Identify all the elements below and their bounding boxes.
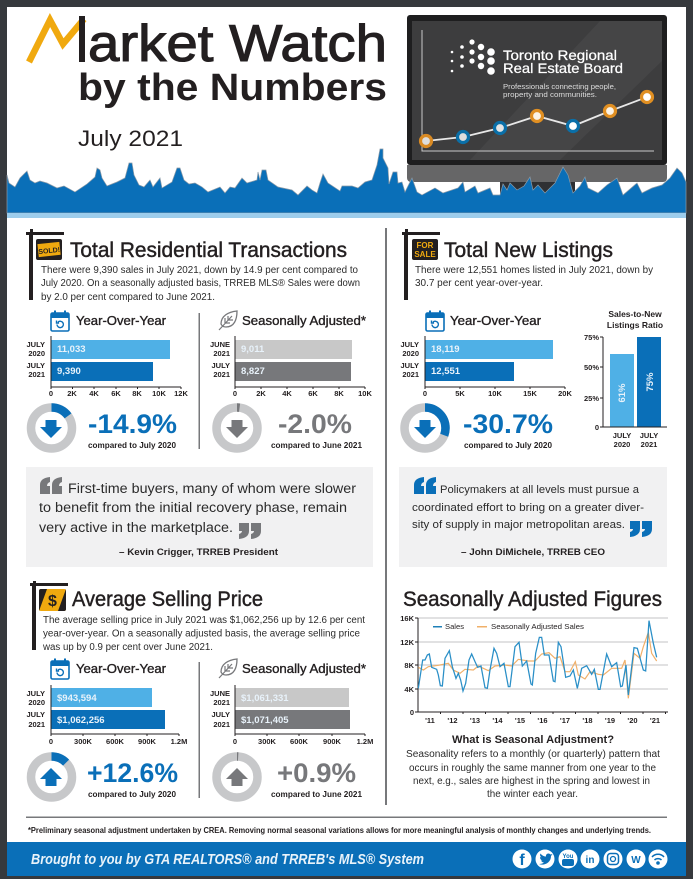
callout: Kevin Crigger quote <box>26 467 373 567</box>
panel: total residential transactions <box>26 229 372 450</box>
bar chart: seasonally adjusted price: $1,071,405 <box>241 715 289 726</box>
panel: total new listings <box>401 229 667 450</box>
icon: for sale sign: SALE <box>414 250 436 259</box>
line chart: sales and seasonally adjusted sales: 0 <box>410 708 414 717</box>
bar chart: sales year over year: 4K <box>89 389 99 398</box>
explainer: what is seasonal adjustment: the winter each year. <box>487 789 578 800</box>
column chart: sales-to-new listings ratio: 75% <box>584 333 599 342</box>
column chart: sales-to-new listings ratio: Listings Ratio <box>607 320 663 330</box>
bar chart: listings year over year: 2021 <box>402 370 419 379</box>
bar chart: price year over year <box>27 685 187 746</box>
column chart: sales-to-new listings ratio: JULY <box>613 431 631 440</box>
line chart: sales and seasonally adjusted sales: '13 <box>470 716 480 725</box>
column chart: sales-to-new listings ratio: 61% <box>617 383 628 403</box>
line chart: sales and seasonally adjusted sales: '17 <box>560 716 570 725</box>
bar chart: seasonally adjusted price: 300K <box>258 737 277 746</box>
attribution: – Kevin Crigger, TRREB President <box>119 547 278 557</box>
bar chart: listings year over year: 5K <box>455 389 465 398</box>
heading: Total Residential Transactions <box>70 238 347 262</box>
bar chart: sales year over year: JULY <box>27 340 45 349</box>
body text: There were 12,551 homes listed in July 2021, down by <box>415 265 653 276</box>
footer rule <box>26 816 667 818</box>
screen line chart <box>420 92 652 146</box>
footer tagline: Brought to you by GTA REALTORS® and TRREB's MLS® System <box>31 851 424 868</box>
column chart: sales-to-new listings ratio <box>584 309 667 449</box>
stat caption: compared to July 2020 <box>88 790 177 799</box>
donut: minus 14.9 per cent <box>31 408 72 448</box>
callout: John DiMichele quote <box>399 467 667 567</box>
bar chart: seasonally adjusted sales <box>210 336 372 398</box>
body text: 30.7 per cent year-over-year. <box>415 278 543 289</box>
bar chart: seasonally adjusted price: 1.2M <box>357 737 373 746</box>
stat -30.7%: -30.7% <box>463 409 553 439</box>
bar chart: price year over year: JULY <box>27 710 45 719</box>
bar chart: price year over year: JULY <box>27 689 45 698</box>
bar chart: sales year over year: 2K <box>67 389 77 398</box>
body text <box>415 265 653 289</box>
donut: plus 0.9 per cent <box>216 756 258 798</box>
body text: July 2020. On a seasonally adjusted basis, TRREB MLS® Sales were down <box>41 278 360 289</box>
bar chart: seasonally adjusted sales: 4K <box>282 389 292 398</box>
bar chart: seasonally adjusted sales: 0 <box>233 389 237 398</box>
body text: was up by 0.9 per cent over June 2021. <box>42 642 213 653</box>
line chart: sales and seasonally adjusted sales: 16K <box>400 614 415 623</box>
subheading seasonally adjusted: Seasonally Adjusted* <box>242 662 366 676</box>
bar chart: sales year over year: 11,033 <box>57 344 86 355</box>
subheading year-over-year: Year-Over-Year <box>450 314 541 328</box>
stat -2.0%: -2.0% <box>278 409 352 439</box>
stat caption: compared to June 2021 <box>271 790 363 799</box>
icon: for sale sign <box>402 229 440 300</box>
sales series <box>418 621 657 695</box>
icon: leaf <box>219 311 237 330</box>
title: arket Watch <box>88 15 387 73</box>
panel: seasonally adjusted figures <box>400 587 668 800</box>
line chart: sales and seasonally adjusted sales: '19 <box>605 716 615 725</box>
bar chart: sales year over year: 10K <box>152 389 166 398</box>
stat caption: compared to June 2021 <box>271 441 363 450</box>
monitor with TRREB logo <box>407 15 667 198</box>
column chart: sales-to-new listings ratio: 75% <box>645 372 656 392</box>
body text: The average selling price in July 2021 was $1,062,256 up by 12.6 per cent <box>43 615 365 626</box>
line chart: sales and seasonally adjusted sales: 8K <box>404 661 415 670</box>
quote text <box>412 484 644 531</box>
body text: year-over-year. On a seasonally adjusted basis, the average selling price <box>43 628 360 640</box>
subheading year-over-year: Year-Over-Year <box>76 314 166 328</box>
bar chart: price year over year: $943,594 <box>57 693 97 704</box>
bar chart: seasonally adjusted price: $1,061,331 <box>241 693 289 704</box>
bar chart: seasonally adjusted sales: 2021 <box>213 370 230 379</box>
quote text: First-time buyers, many of whom were slower <box>68 481 357 496</box>
bar chart: sales year over year <box>27 336 188 398</box>
donut: minus 2.0 per cent <box>216 408 258 448</box>
body text <box>42 615 365 653</box>
icon: open quote <box>414 477 436 494</box>
bar chart: seasonally adjusted price: 900K <box>323 737 342 746</box>
donut: plus 12.6 per cent <box>31 756 72 798</box>
quote text: very active in the marketplace. <box>39 520 233 535</box>
panel: average selling price <box>27 581 373 799</box>
attribution: – John DiMichele, TRREB CEO <box>461 547 605 557</box>
column chart: sales-to-new listings ratio: JULY <box>640 431 658 440</box>
divider <box>198 313 200 449</box>
social icons: f <box>519 852 525 869</box>
body text <box>41 265 360 303</box>
bar chart: sales year over year: 9,390 <box>57 366 81 377</box>
subheading year-over-year: Year-Over-Year <box>76 662 166 676</box>
heading: Seasonally Adjusted Figures <box>403 587 662 611</box>
icon: calendar <box>51 310 69 331</box>
line chart: sales and seasonally adjusted sales <box>400 614 668 725</box>
seasonally adjusted series <box>418 632 657 698</box>
line chart: sales and seasonally adjusted sales: '11 <box>425 716 435 725</box>
divider <box>198 662 200 798</box>
quote text <box>39 481 357 535</box>
bar chart: listings year over year: JULY <box>401 340 419 349</box>
footnote: *Preliminary seasonal adjustment undertaken by CREA. Removing normal seasonal variations allows for more meaningful analysis of monthly changes and underlying trends. <box>28 826 651 835</box>
line chart: sales and seasonally adjusted sales: '15 <box>515 716 525 725</box>
line chart: sales and seasonally adjusted sales: '14 <box>492 716 503 725</box>
icon: dollar sign <box>30 581 68 650</box>
body text: There were 9,390 sales in July 2021, down by 14.9 per cent compared to <box>41 265 358 276</box>
bar chart: listings year over year: JULY <box>401 361 419 370</box>
column chart: sales-to-new listings ratio: 2020 <box>614 440 630 449</box>
bar chart: seasonally adjusted sales: 9,011 <box>241 344 265 355</box>
title: by the Numbers <box>78 67 387 109</box>
icon: open quote <box>40 477 62 494</box>
monitor with TRREB logo: Real Estate Board <box>503 60 623 76</box>
line chart: sales and seasonally adjusted sales: 4K <box>404 685 415 694</box>
bar chart: listings year over year: 12,551 <box>431 366 461 377</box>
bar chart: sales year over year: 12K <box>174 389 188 398</box>
bar chart: sales year over year: 2020 <box>28 349 45 358</box>
bar chart: sales year over year: 8K <box>132 389 142 398</box>
line chart: sales and seasonally adjusted sales: '18 <box>582 716 593 725</box>
heading: Average Selling Price <box>72 587 263 611</box>
column chart: sales-to-new listings ratio: Sales-to-New <box>608 309 662 319</box>
stat -14.9%: -14.9% <box>88 409 177 439</box>
social icons: You <box>563 854 574 860</box>
bar chart: seasonally adjusted sales: JUNE <box>210 340 230 349</box>
stat +0.9%: +0.9% <box>277 758 356 788</box>
bar chart: seasonally adjusted sales: 8,827 <box>241 366 265 377</box>
social icons <box>512 850 668 869</box>
bar chart: listings year over year: 20K <box>558 389 572 398</box>
icon: close quote <box>630 521 652 537</box>
heading: Total New Listings <box>444 238 613 262</box>
line chart: sales and seasonally adjusted sales: 12K <box>400 638 415 647</box>
bar chart: price year over year: 2020 <box>28 698 45 707</box>
social icons: in <box>586 855 594 866</box>
icon: sold sign <box>26 229 64 300</box>
stat +12.6%: +12.6% <box>87 758 178 788</box>
social icons: W <box>631 855 641 866</box>
bar chart: sales year over year: 6K <box>111 389 121 398</box>
skyline banner <box>7 149 686 218</box>
monitor with TRREB logo: property and communities. <box>503 90 597 99</box>
body text: by 2.0 per cent compared to June 2021. <box>41 292 215 303</box>
legend: Seasonally Adjusted Sales <box>491 622 584 631</box>
subheading seasonally adjusted: Seasonally Adjusted* <box>242 314 366 328</box>
explainer: what is seasonal adjustment: Seasonality refers to a monthly (or quarterly) pattern that <box>406 749 660 760</box>
legend: Sales <box>445 622 464 631</box>
explainer: what is seasonal adjustment: What is Seasonal Adjustment? <box>452 734 614 746</box>
column chart: sales-to-new listings ratio: 2021 <box>641 440 657 449</box>
bar chart: seasonally adjusted sales: 10K <box>358 389 372 398</box>
bar chart: seasonally adjusted price: 600K <box>290 737 309 746</box>
bar chart: listings year over year: 0 <box>423 389 427 398</box>
bar chart: price year over year: 600K <box>106 737 125 746</box>
bar chart: price year over year: 2021 <box>28 720 45 729</box>
column chart: sales-to-new listings ratio: 50% <box>584 363 599 372</box>
column chart: sales-to-new listings ratio: 0 <box>595 423 599 432</box>
title <box>29 15 387 151</box>
line chart: sales and seasonally adjusted sales: '12 <box>447 716 458 725</box>
line chart: sales and seasonally adjusted sales: '20 <box>627 716 638 725</box>
logo M zigzag <box>29 19 84 62</box>
bar chart: seasonally adjusted price: JULY <box>212 710 230 719</box>
bar chart: sales year over year: 0 <box>49 389 53 398</box>
bar chart: listings year over year: 18,119 <box>431 344 460 355</box>
logo dots <box>451 39 495 75</box>
center divider <box>385 228 387 805</box>
bar chart: price year over year: $1,062,256 <box>57 715 105 726</box>
icon: dollar sign: $ <box>48 593 57 610</box>
line chart: sales and seasonally adjusted sales: '16 <box>537 716 548 725</box>
icon: calendar <box>51 658 69 679</box>
explainer: what is seasonal adjustment <box>406 734 660 800</box>
bar chart: price year over year: 900K <box>138 737 157 746</box>
monitor with TRREB logo: Toronto Regional <box>503 47 617 63</box>
monitor with TRREB logo: Professionals connecting people, <box>503 82 616 91</box>
bar chart: seasonally adjusted price: JUNE <box>210 689 230 698</box>
quote text: Policymakers at all levels must pursue a <box>440 484 640 496</box>
bar chart: price year over year: 300K <box>74 737 93 746</box>
donut: minus 30.7 per cent <box>404 408 446 448</box>
bar chart: seasonally adjusted sales: 2K <box>256 389 266 398</box>
bar chart: listings year over year: 2020 <box>402 349 419 358</box>
line chart: sales and seasonally adjusted sales: '21 <box>650 716 660 725</box>
stat caption: compared to July 2020 <box>464 441 553 450</box>
bar chart: seasonally adjusted price: 2021 <box>213 720 230 729</box>
bar chart: listings year over year <box>401 336 572 398</box>
icon: close quote <box>239 523 261 539</box>
bar chart: seasonally adjusted sales: JULY <box>212 361 230 370</box>
bar chart: listings year over year: 15K <box>523 389 537 398</box>
bar chart: seasonally adjusted sales: 8K <box>334 389 344 398</box>
legend <box>433 622 584 631</box>
bar chart: listings year over year: 10K <box>488 389 502 398</box>
bar chart: seasonally adjusted sales: 2021 <box>213 349 230 358</box>
icon: calendar <box>426 310 444 331</box>
stat caption: compared to July 2020 <box>88 441 177 450</box>
bar chart: sales year over year: JULY <box>27 361 45 370</box>
bar chart: seasonally adjusted price: 2021 <box>213 698 230 707</box>
bar chart: price year over year: 1.2M <box>171 737 187 746</box>
bar chart: seasonally adjusted price: 0 <box>233 737 237 746</box>
icon: leaf <box>219 659 237 678</box>
explainer: what is seasonal adjustment: occurs in roughly the same manner from one year to the <box>409 763 656 774</box>
quote text: coordinated effort to bring on a greater diver- <box>412 502 644 514</box>
explainer: what is seasonal adjustment: next, e.g., sales are highest in the spring and lowest in <box>413 776 650 787</box>
bar chart: seasonally adjusted sales: 6K <box>308 389 318 398</box>
footer band <box>7 842 686 876</box>
bar chart: seasonally adjusted price <box>210 685 373 746</box>
icon: for sale sign: FOR <box>417 241 434 250</box>
title: July 2021 <box>78 126 183 151</box>
column chart: sales-to-new listings ratio: 25% <box>584 394 599 403</box>
quote text: sity of supply in major metropolitan areas. <box>412 519 625 531</box>
icon: sold sign: SOLD! <box>38 247 60 256</box>
bar chart: price year over year: 0 <box>49 737 53 746</box>
bar chart: sales year over year: 2021 <box>28 370 45 379</box>
quote text: to benefit from the initial recovery phase, remain <box>39 500 347 515</box>
